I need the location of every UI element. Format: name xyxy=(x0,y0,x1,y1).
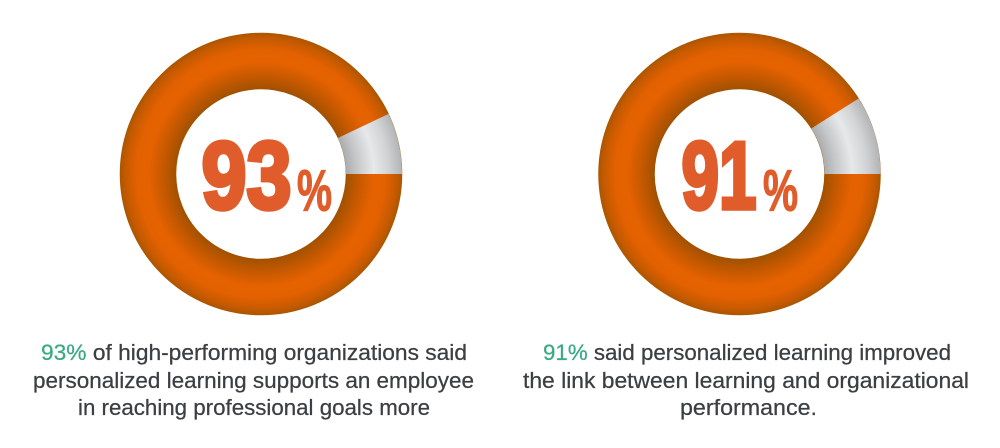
caption line 1: 93% of high-performing organizations said xyxy=(41,340,467,365)
donut chart: 91% xyxy=(626,61,880,287)
caption line 2: the link between learning and organizational xyxy=(523,368,969,393)
caption: 91% xyxy=(523,340,969,420)
digits 93: 93 xyxy=(202,122,292,230)
caption line 3: performance. xyxy=(680,395,817,420)
ring segment: grey 9% xyxy=(811,98,880,174)
ring segment: orange 91% xyxy=(626,61,852,287)
percent sign: % xyxy=(763,158,798,224)
digits 91: 91 xyxy=(682,122,756,230)
panel: 93 percent statistic xyxy=(33,61,474,420)
value: 91% xyxy=(682,122,798,230)
ring segment: grey 7% xyxy=(338,114,402,174)
caption line 3: in reaching professional goals more xyxy=(78,395,430,420)
caption: 93% xyxy=(33,340,474,420)
caption line 1: 91% said personalized learning improved xyxy=(543,340,951,365)
ring segment: orange 93% xyxy=(148,61,374,287)
value: 93% xyxy=(202,122,332,230)
percent sign: % xyxy=(297,158,332,224)
panel: 91 percent statistic xyxy=(523,61,969,420)
donut chart: 93% xyxy=(148,61,402,287)
caption line 2: personalized learning supports an employee xyxy=(33,368,474,393)
